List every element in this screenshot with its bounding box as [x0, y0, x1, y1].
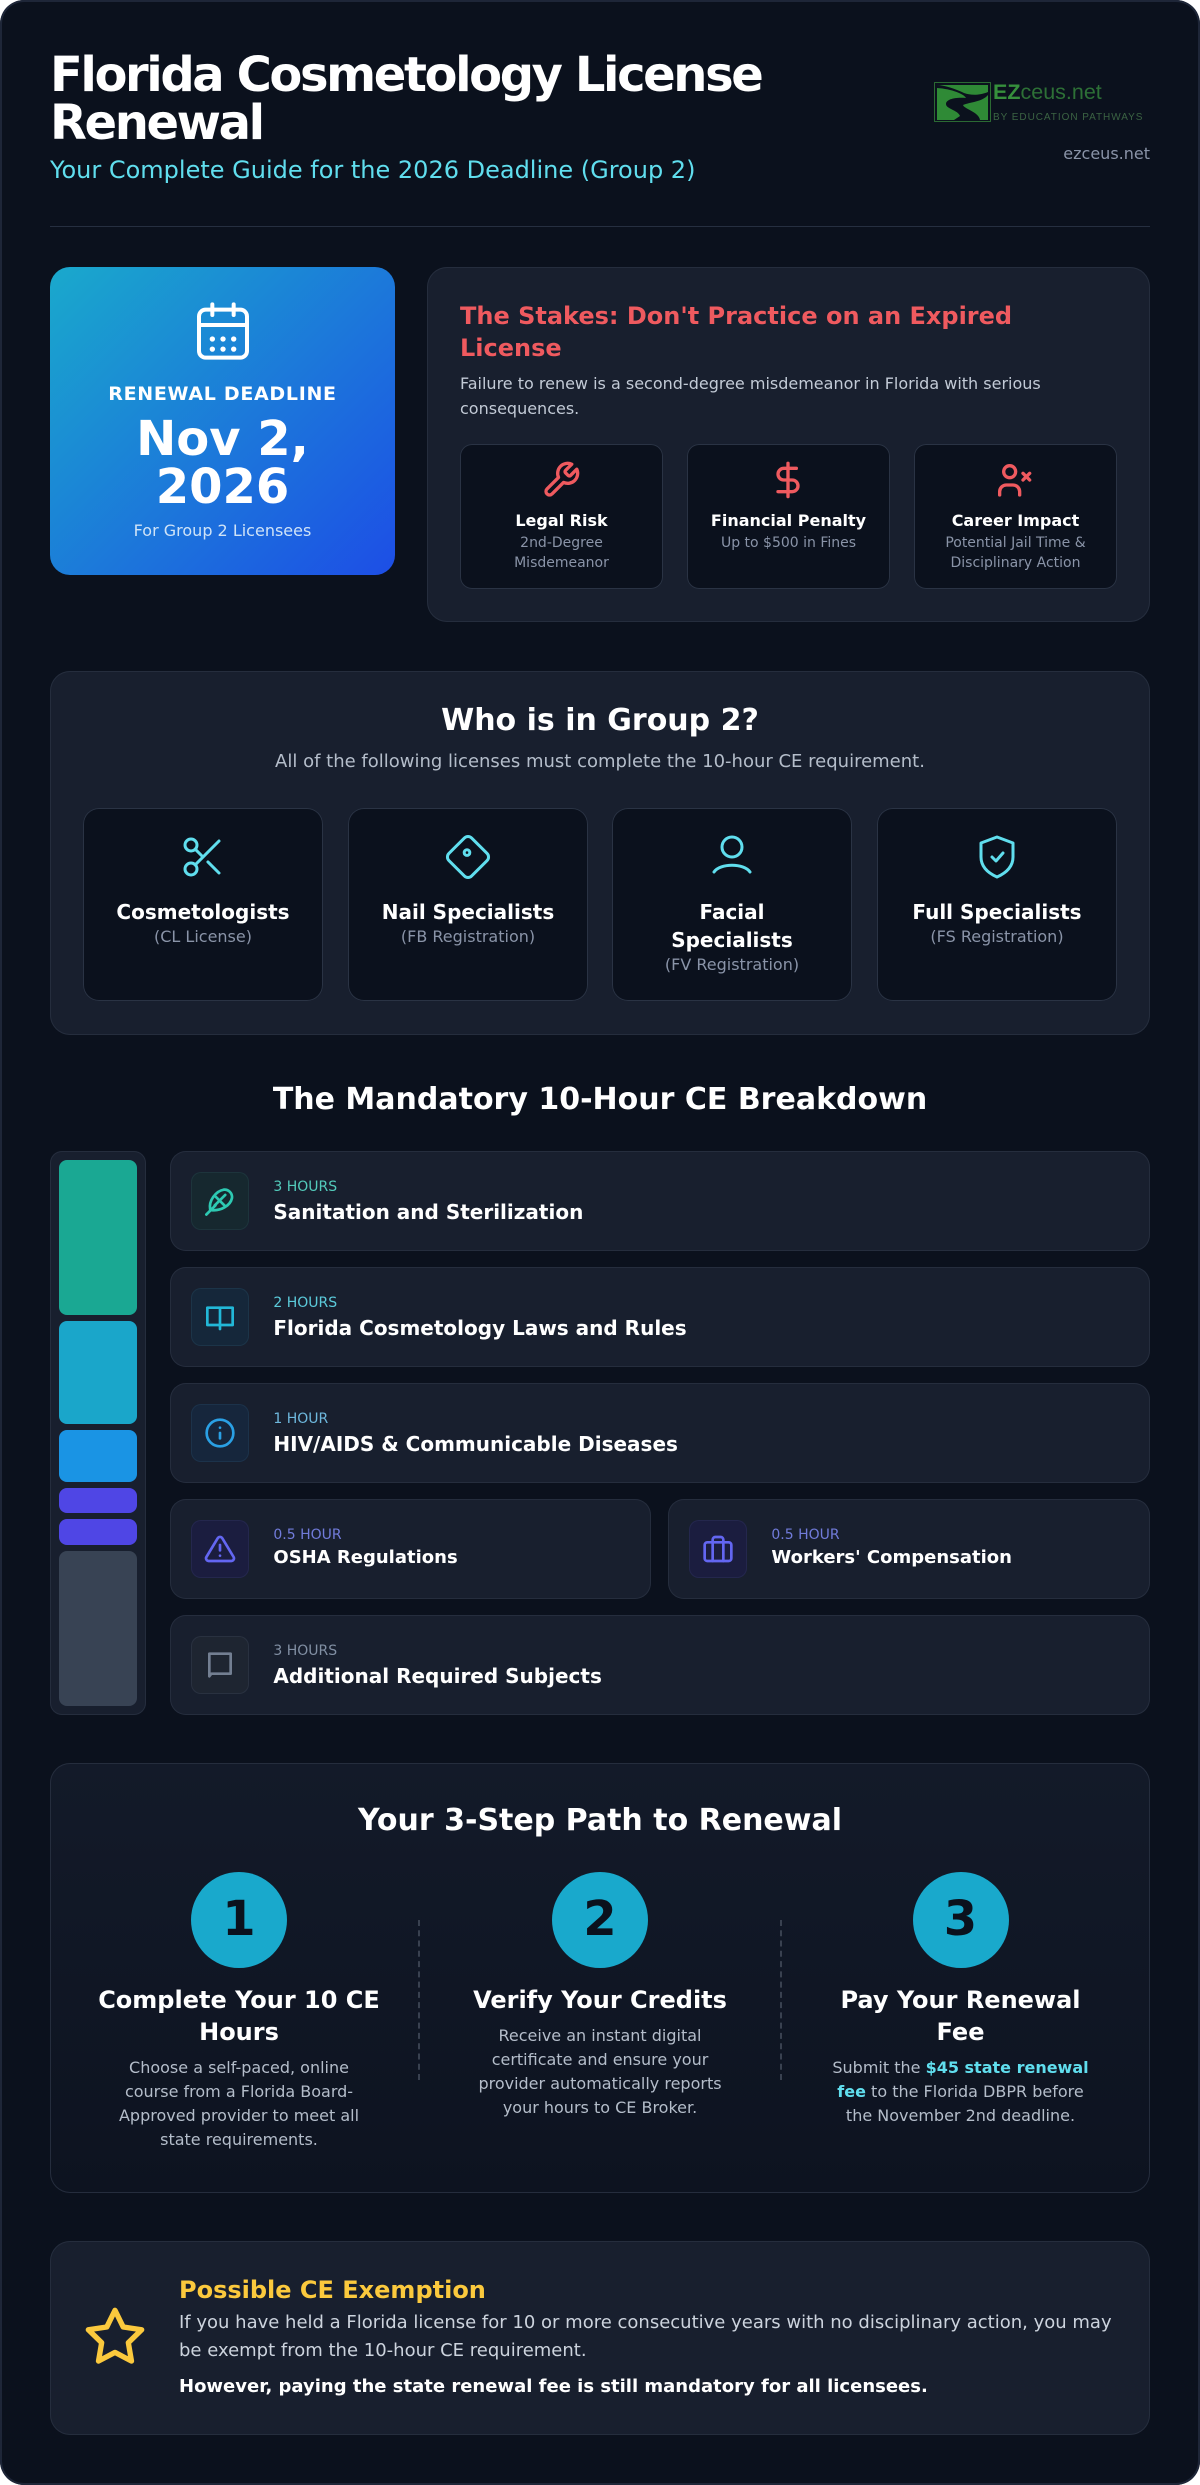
card: full specialists	[877, 808, 1117, 1001]
legal risk title: Legal Risk	[515, 511, 608, 530]
step 2 text	[478, 2026, 722, 2117]
workers comp title: Workers' Compensation	[771, 1547, 1012, 1568]
laws hours: 2 HOURS	[273, 1295, 337, 1311]
step 1	[98, 1872, 380, 2149]
bar segment: 3 hours additional	[59, 1551, 137, 1706]
nail specialists title: Nail Specialists	[382, 900, 554, 924]
stakes description	[460, 374, 1041, 418]
sanitation hours: 3 HOURS	[273, 1179, 337, 1195]
bar segment: 3 hours sanitation	[59, 1160, 137, 1315]
icon: info	[191, 1404, 249, 1462]
stakes description: consequences.	[460, 399, 579, 418]
group 2 heading: Who is in Group 2?	[441, 703, 759, 738]
bar segment: 2 hours laws	[59, 1321, 137, 1424]
step 2 text: certificate and ensure your	[492, 2050, 708, 2069]
OSHA hours: 0.5 HOUR	[273, 1527, 342, 1543]
laws title: Florida Cosmetology Laws and Rules	[273, 1316, 687, 1340]
row: OSHA regulations	[170, 1499, 651, 1599]
deadline date: Nov 2,	[136, 410, 309, 466]
icon: road logo mark	[934, 82, 991, 122]
logo byline: BY EDUCATION PATHWAYS	[993, 112, 1143, 123]
step 1 title	[98, 1986, 380, 2046]
step 3 text: Submit the $45 state renewal	[832, 2058, 1089, 2077]
title: Renewal	[50, 95, 263, 151]
step 3 text	[832, 2058, 1089, 2125]
card: nail specialists	[348, 808, 588, 1001]
exemption text: be exempt from the 10-hour CE requirement.	[179, 2340, 587, 2361]
step 3 title: Pay Your Renewal	[840, 1986, 1081, 2014]
step 1 text: course from a Florida Board-	[125, 2082, 353, 2101]
panel: who is in group 2	[50, 671, 1150, 1035]
workers comp hours: 0.5 HOUR	[771, 1527, 840, 1543]
step 2 number	[552, 1872, 648, 1968]
icon: warning triangle	[191, 1520, 249, 1578]
icon: scissors	[184, 838, 221, 876]
deadline date	[136, 410, 309, 514]
CE breakdown heading: The Mandatory 10-Hour CE Breakdown	[273, 1082, 927, 1117]
logo: EZceus.net	[934, 80, 1143, 123]
deadline label: RENEWAL DEADLINE	[108, 383, 337, 405]
step 3 number	[912, 1872, 1008, 1968]
HIV hours: 1 HOUR	[273, 1411, 328, 1427]
panel: possible CE exemption	[50, 2241, 1150, 2434]
sanitation title: Sanitation and Sterilization	[273, 1200, 583, 1224]
icon: shield check	[980, 836, 1014, 878]
full specialists registration: (FS Registration)	[930, 927, 1064, 946]
step 2 text: Receive an instant digital	[498, 2026, 701, 2045]
additional title: Additional Required Subjects	[273, 1664, 602, 1688]
legal risk text	[514, 535, 609, 571]
row: workers compensation	[668, 1499, 1150, 1599]
panel: renewal deadline	[50, 267, 395, 575]
header divider	[50, 226, 1150, 227]
career impact title: Career Impact	[952, 511, 1079, 530]
icon: briefcase	[689, 1520, 747, 1578]
card: facial specialists	[612, 808, 852, 1001]
bar segment: 0.5 hour OSHA	[59, 1488, 137, 1513]
stakes heading: License	[460, 334, 562, 362]
subtitle: Your Complete Guide for the 2026 Deadline (Group 2)	[50, 156, 695, 184]
icon: user with x	[998, 464, 1032, 497]
card: career impact	[914, 444, 1117, 589]
exemption note: However, paying the state renewal fee is still mandatory for all licensees.	[179, 2376, 928, 2397]
legal risk text: Misdemeanor	[514, 555, 609, 571]
row: HIV/AIDS	[170, 1383, 1150, 1483]
logo wordmark: EZceus.net	[993, 80, 1102, 104]
title: Florida Cosmetology License	[50, 47, 761, 103]
icon: calendar	[197, 302, 249, 360]
facial specialists title: Facial	[699, 900, 765, 924]
financial penalty text: Up to $500 in Fines	[721, 535, 856, 551]
card: financial penalty	[687, 444, 890, 589]
step 2	[473, 1872, 727, 2117]
HIV title: HIV/AIDS & Communicable Diseases	[273, 1432, 678, 1456]
deadline date: 2026	[156, 458, 289, 514]
icon: chat bubble	[191, 1636, 249, 1694]
deadline note: For Group 2 Licensees	[134, 521, 311, 540]
group 2 description: All of the following licenses must complete the 10-hour CE requirement.	[275, 751, 925, 772]
cosmetologists title: Cosmetologists	[116, 900, 290, 924]
panel: 3-step path	[50, 1763, 1150, 2192]
icon: open book	[191, 1288, 249, 1346]
website label: ezceus.net	[1063, 144, 1150, 163]
steps heading: Your 3-Step Path to Renewal	[358, 1803, 842, 1838]
step 1 title: Hours	[199, 2018, 279, 2046]
full specialists title: Full Specialists	[912, 900, 1082, 924]
career impact text	[945, 535, 1086, 571]
row: florida laws and rules	[170, 1267, 1150, 1367]
career impact text: Potential Jail Time &	[945, 535, 1086, 551]
step divider 2	[780, 1920, 782, 2080]
step 3 number: 3	[944, 1891, 977, 1947]
financial penalty title: Financial Penalty	[711, 511, 866, 530]
step 2 text: your hours to CE Broker.	[503, 2098, 697, 2117]
step 1 title: Complete Your 10 CE	[98, 1986, 380, 2014]
legal risk text: 2nd-Degree	[520, 535, 603, 551]
career impact text: Disciplinary Action	[950, 555, 1080, 571]
card: cosmetologists	[83, 808, 323, 1001]
step 1 text: state requirements.	[160, 2130, 318, 2149]
nail specialists registration: (FB Registration)	[401, 927, 535, 946]
step 3	[832, 1872, 1089, 2125]
row: additional required subjects	[170, 1615, 1150, 1715]
facial specialists title: Specialists	[671, 928, 793, 952]
exemption heading: Possible CE Exemption	[179, 2276, 486, 2304]
step 3 text: the November 2nd deadline.	[846, 2106, 1075, 2125]
panel: the stakes	[427, 267, 1150, 622]
step 1 text	[119, 2058, 359, 2149]
step 1 number: 1	[222, 1891, 256, 1947]
facial specialists registration: (FV Registration)	[665, 955, 799, 974]
step 1 number	[191, 1872, 287, 1968]
step 1 text: Approved provider to meet all	[119, 2106, 359, 2125]
step 2 number: 2	[583, 1891, 617, 1947]
stakes description: Failure to renew is a second-degree misdemeanor in Florida with serious	[460, 374, 1041, 393]
row: sanitation and sterilization	[170, 1151, 1150, 1251]
facial specialists title	[671, 900, 793, 952]
bar segment: 1 hour HIV/AIDS	[59, 1430, 137, 1482]
exemption text: If you have held a Florida license for 10 or more consecutive years with no disciplinary action, you may	[179, 2312, 1112, 2333]
icon: wrench	[544, 462, 580, 497]
step 2 text: provider automatically reports	[478, 2074, 722, 2093]
step divider 1	[418, 1920, 420, 2080]
exemption text	[179, 2312, 1112, 2361]
step 2 title: Verify Your Credits	[473, 1986, 727, 2014]
icon: star	[86, 2308, 144, 2364]
icon: tag	[446, 835, 490, 879]
additional hours: 3 HOURS	[273, 1643, 337, 1659]
icon: feather	[191, 1172, 249, 1230]
step 3 title: Fee	[936, 2018, 984, 2046]
card: legal risk	[460, 444, 663, 589]
title	[50, 47, 762, 151]
stakes heading	[460, 302, 1012, 362]
chart: CE hours stacked bar	[50, 1151, 146, 1714]
step 3 title	[840, 1986, 1081, 2046]
icon: dollar sign	[776, 462, 800, 498]
bar segment: 0.5 hour workers comp	[59, 1519, 137, 1545]
stakes heading: The Stakes: Don't Practice on an Expired	[460, 302, 1012, 330]
icon: person	[712, 836, 752, 874]
step 3 text: fee to the Florida DBPR before	[837, 2082, 1084, 2101]
step 1 text: Choose a self-paced, online	[129, 2058, 349, 2077]
cosmetologists license: (CL License)	[154, 927, 252, 946]
OSHA title: OSHA Regulations	[273, 1547, 458, 1568]
